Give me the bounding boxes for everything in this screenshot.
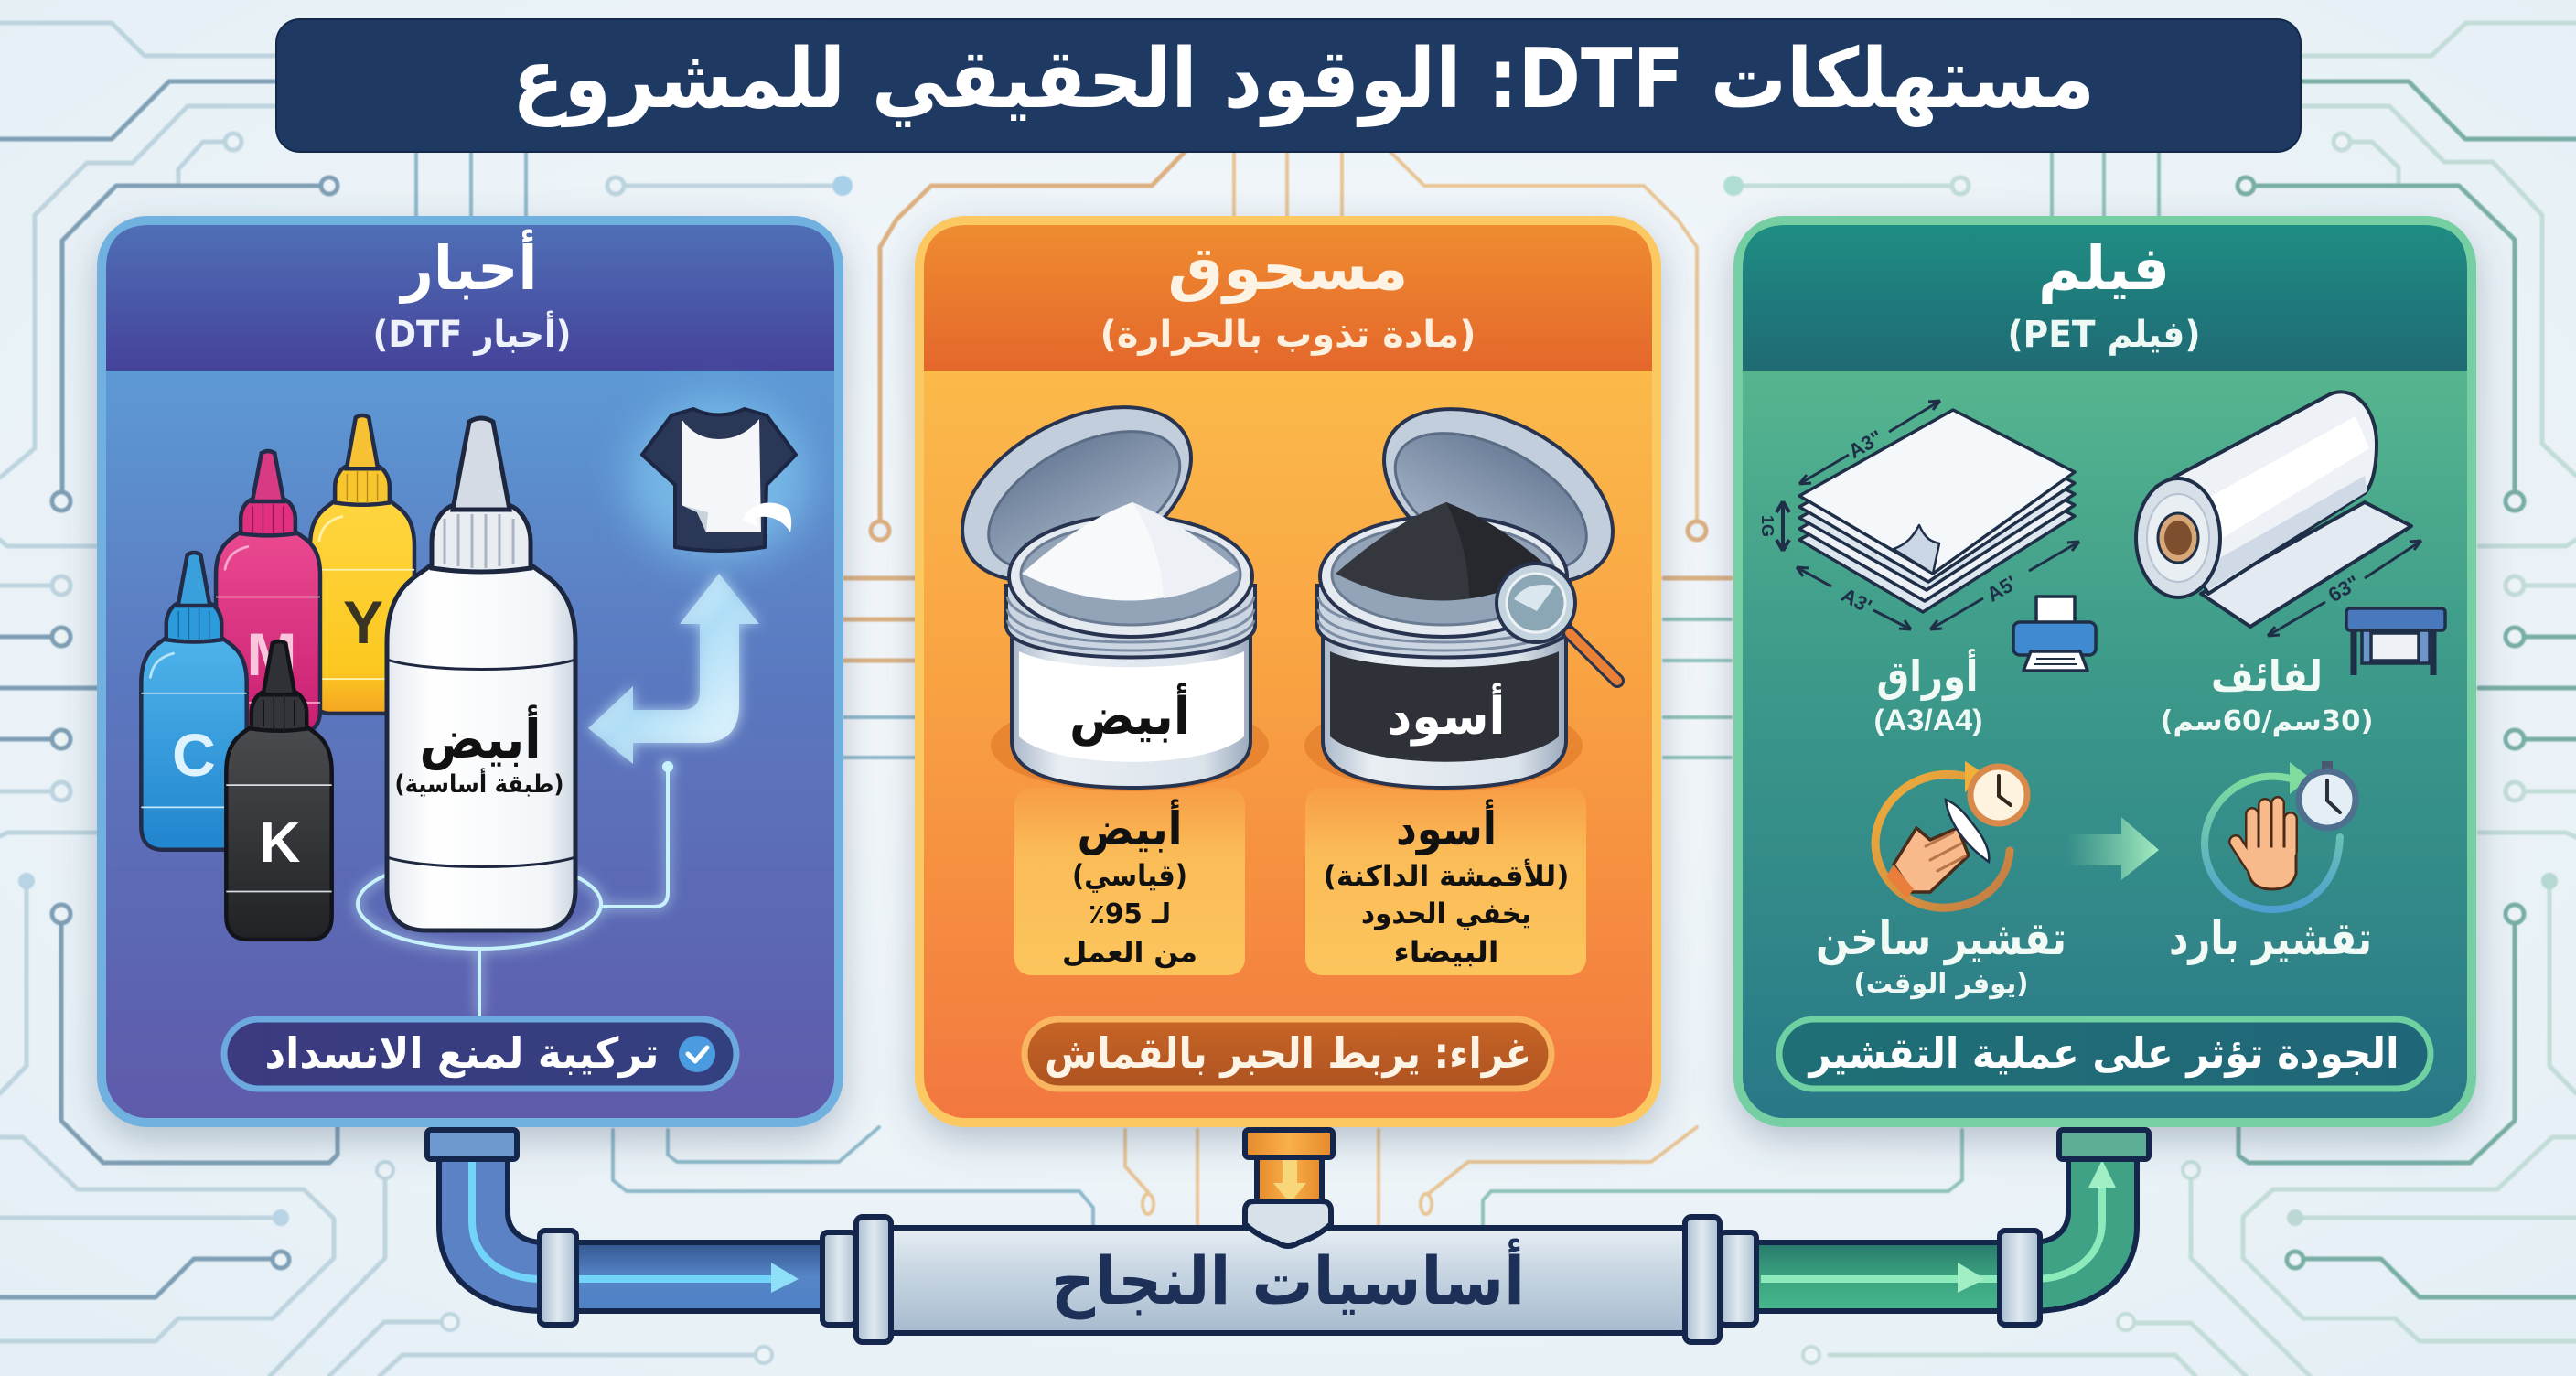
heading: powder: مسحوق bbox=[1167, 233, 1409, 305]
panel header band bbox=[924, 225, 1652, 371]
icon: check badge bbox=[679, 1036, 715, 1072]
icon: black ink bottle bbox=[226, 641, 332, 940]
icon: film roll bbox=[2136, 392, 2411, 627]
label: saves time: (يوفر الوقت) bbox=[1853, 968, 2029, 1000]
dimension labels on sheets: 1G bbox=[1758, 515, 1776, 537]
label: K: K bbox=[260, 812, 301, 875]
label: A3/A4: (A3/A4) bbox=[1873, 704, 1983, 736]
title text: مستهلكات DTF: الوقود الحقيقي للمشروع bbox=[512, 31, 2095, 128]
icon: desktop printer bbox=[2013, 597, 2096, 671]
arrow: hot to cold bbox=[2066, 817, 2159, 880]
circuit ring and connectors under white bottle bbox=[358, 763, 671, 1016]
dimension labels on sheets: A3" bbox=[1844, 425, 1886, 463]
icon: t-shirt bbox=[642, 409, 796, 551]
subheading: DTF inks: (أحبار DTF) bbox=[373, 310, 571, 356]
bottle label: white: أبيض bbox=[419, 704, 542, 770]
panel header band bbox=[1743, 225, 2467, 371]
pipe flanges bbox=[822, 1217, 1756, 1342]
center orange inlet with arrow bbox=[1245, 1130, 1333, 1246]
arrow: glowing layer arrow bbox=[588, 574, 759, 764]
dimension labels on sheets: A5' bbox=[1983, 571, 2021, 607]
subheading: heat-melting material: (مادة تذوب بالحرارة) bbox=[1100, 314, 1476, 356]
icon: glow behind t-shirt bbox=[628, 398, 810, 563]
label: rolls: لفائف bbox=[2211, 651, 2323, 701]
heading: film: فيلم bbox=[2038, 233, 2170, 304]
label: M: M bbox=[247, 620, 296, 688]
card: black powder description: أسود bbox=[1396, 799, 1497, 856]
dimension arrows on sheets bbox=[1776, 401, 2079, 629]
label on black jar: أسود bbox=[1387, 683, 1506, 747]
callout text: غراء: يربط الحبر بالقماش bbox=[1045, 1028, 1531, 1078]
icon: white ink bottle bbox=[387, 418, 575, 930]
label: cold peel: تقشير بارد bbox=[2169, 912, 2372, 966]
dimension labels on sheets bbox=[1758, 425, 2021, 618]
bottle label: base layer: (طبقة أساسية) bbox=[395, 768, 564, 799]
dimension labels on sheets: A3' bbox=[1838, 584, 1875, 618]
label on white jar: أبيض bbox=[1069, 683, 1190, 747]
callout pill: quality bbox=[1779, 1019, 2431, 1089]
callout pill: glue bbox=[1025, 1019, 1551, 1089]
icon: cold peel bbox=[2205, 761, 2356, 909]
panel: powder bbox=[919, 220, 1657, 1123]
icon: yellow ink bottle bbox=[310, 415, 414, 714]
icon: magnifying glass bbox=[1497, 564, 1617, 681]
card: white powder description: لـ 95٪ bbox=[1089, 898, 1171, 930]
label: C: C bbox=[172, 721, 216, 789]
dimension arrow on roll: 63" bbox=[2324, 571, 2364, 607]
callout text: الجودة تؤثر على عملية التقشير bbox=[1808, 1028, 2399, 1078]
heading: inks: أحبار bbox=[399, 229, 538, 304]
card: white powder description: أبيض bbox=[1078, 799, 1182, 855]
callout pill: anti-clog bbox=[224, 1019, 736, 1089]
icon: stack of sheets bbox=[1799, 410, 2075, 612]
pipeline: foundations of success bbox=[427, 1130, 2149, 1342]
pipe label: أساسيات النجاح bbox=[1051, 1238, 1525, 1320]
card: black powder description: البيضاء bbox=[1394, 936, 1498, 969]
icon: black powder jar bbox=[1304, 373, 1642, 791]
icon: magenta ink bottle bbox=[216, 451, 320, 733]
card: black powder description: يخفي الحدود bbox=[1361, 898, 1531, 930]
icon: white powder jar bbox=[933, 371, 1269, 791]
card: black powder description: (للأقمشة الداكنة) bbox=[1323, 858, 1570, 893]
panel header band bbox=[106, 225, 834, 371]
card: white powder description: (قياسي) bbox=[1072, 858, 1187, 893]
label: roll widths: (30سم/60سم) bbox=[2161, 705, 2373, 737]
right green pipe bbox=[1752, 1130, 2149, 1325]
label: sheets: أوراق bbox=[1877, 649, 1978, 701]
icon: large format printer bbox=[2346, 608, 2445, 675]
card: white powder description bbox=[1014, 788, 1245, 975]
label: hot peel: تقشير ساخن bbox=[1816, 912, 2066, 966]
title bar bbox=[276, 19, 2301, 152]
card: black powder description bbox=[1305, 788, 1586, 975]
dimension arrow on roll bbox=[2268, 541, 2421, 636]
subheading: PET film: (فيلم PET) bbox=[2007, 314, 2201, 356]
panel: inks bbox=[102, 220, 839, 1123]
icon: hot peel bbox=[1875, 761, 2027, 908]
card: white powder description: من العمل bbox=[1062, 937, 1197, 969]
left blue pipe bbox=[427, 1130, 828, 1325]
callout text: تركيبة لمنع الانسداد bbox=[265, 1028, 659, 1078]
icon: cyan ink bottle bbox=[141, 553, 247, 850]
main pipe bbox=[891, 1228, 1685, 1333]
label: Y: Y bbox=[343, 588, 383, 656]
panel: film bbox=[1738, 220, 2472, 1123]
